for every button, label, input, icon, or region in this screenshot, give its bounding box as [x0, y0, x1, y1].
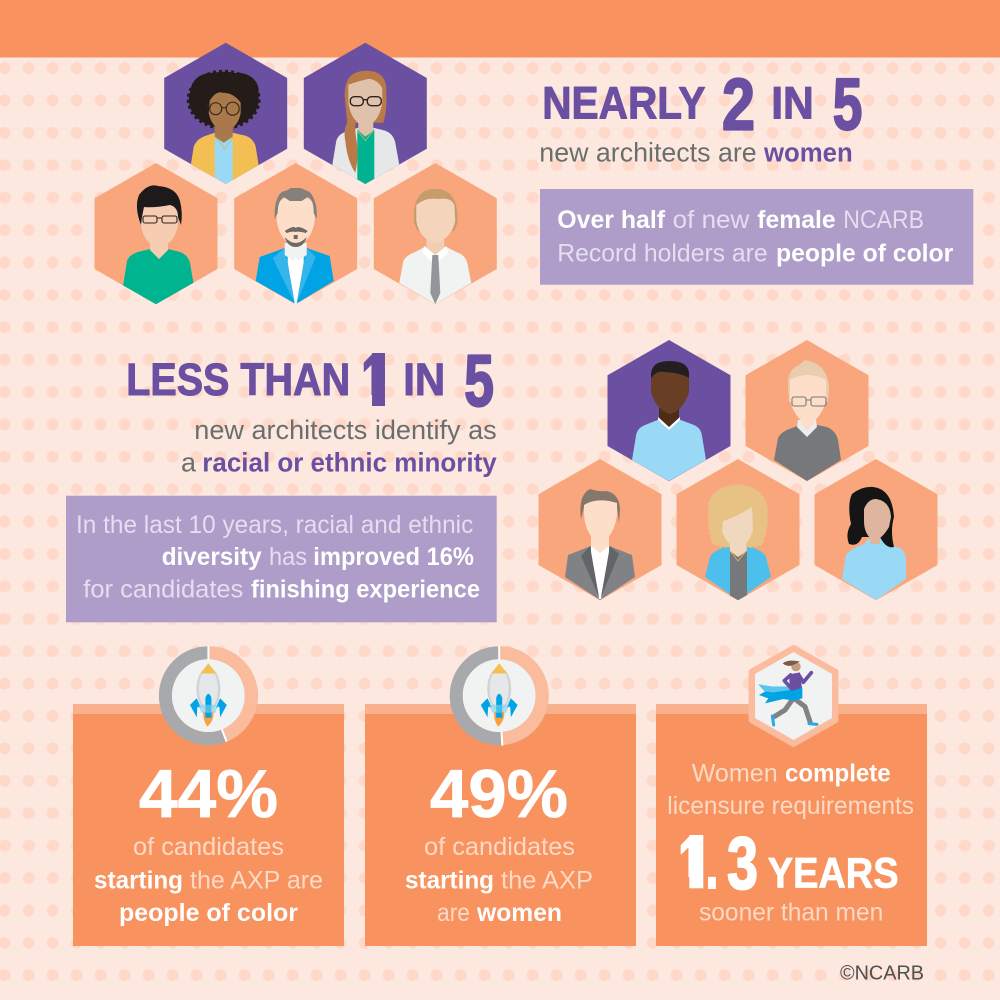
- portrait: woman with afro on purple hexagon: [164, 43, 288, 185]
- portrait: woman with curly blond hair and blue jacket: [676, 459, 800, 601]
- description: of candidates starting the AXP are women: [405, 833, 593, 927]
- description: of candidates starting the AXP are people of color: of candidates: [133, 833, 284, 861]
- heading: less than 1 in 5: IN: [403, 354, 445, 405]
- icon: runner crossing finish ribbon in hexagon: [752, 648, 835, 744]
- statistic: 1.3 years: [680, 835, 898, 890]
- heading: nearly 2 in 5: NEARLY: [542, 78, 706, 128]
- subheading: new architects are women: new architects are: [539, 138, 757, 168]
- card: 44% of candidates: [73, 646, 344, 946]
- statistic: 49%: 49%: [430, 756, 568, 832]
- card: 49% of candidates: [365, 646, 636, 946]
- description: of candidates starting the AXP are women: starting: [405, 866, 494, 894]
- callout: over half of new female record holders: NCARB: [843, 206, 924, 234]
- description: women complete licensure requirements: licensure requirements: [667, 792, 914, 820]
- callout: over half of new female record holders: female: [757, 206, 836, 234]
- icon: rocket: [481, 664, 518, 727]
- portrait: blond older man in grey sweater with glasses: [745, 340, 869, 482]
- callout: racial and ethnic diversity improved 16%: [66, 496, 497, 622]
- portrait: woman with red braid on purple hexagon: [303, 43, 427, 185]
- portrait: woman with long black hair in light blue top: [814, 459, 938, 601]
- heading: nearly 2 in 5: IN: [771, 78, 814, 128]
- donut chart: 44% people of color: [165, 646, 251, 742]
- description: of candidates starting the AXP are women: women: [476, 899, 562, 927]
- description: of candidates starting the AXP are people of color: [94, 833, 323, 927]
- description: of candidates starting the AXP are women: are: [437, 899, 470, 927]
- description: women complete licensure requirements: Women: [692, 760, 778, 788]
- description: women complete licensure requirements: [667, 760, 914, 820]
- heading: less than 1 in 5: [128, 353, 494, 408]
- callout: over half of new female record holders: Over half: [557, 206, 666, 234]
- callout: racial and ethnic diversity improved 16%: improved 16%: [313, 543, 474, 571]
- portrait group: racial and ethnic diversity hexagons: [538, 340, 938, 601]
- portrait group: women and men hexagons: [94, 43, 497, 305]
- copyright: ©NCARB: [840, 962, 924, 984]
- portrait: man with goatee and blue suit: [234, 163, 358, 305]
- callout: racial and ethnic diversity improved 16%: finishing experience: [251, 576, 480, 604]
- heading: less than 1 in 5: LESS THAN: [126, 354, 350, 405]
- heading: less than 1 in 5: 1: [361, 339, 387, 422]
- donut chart: 49% women: [456, 646, 542, 746]
- statistic: 1.3 years: .: [705, 821, 719, 904]
- statistic: 1.3 years: YEARS: [768, 850, 898, 898]
- callout: over half of new female record holders: [540, 189, 973, 285]
- top banner: [0, 0, 1000, 58]
- card: women complete licensure sooner: [656, 648, 927, 946]
- callout: racial and ethnic diversity improved 16%: for candidates: [83, 576, 243, 604]
- callout: racial and ethnic diversity improved 16%: has: [269, 543, 307, 571]
- heading: nearly 2 in 5: [542, 64, 862, 146]
- icon: rocket: [190, 664, 227, 727]
- callout: over half of new female record holders: of new: [673, 206, 750, 234]
- heading: less than 1 in 5: 5: [464, 341, 494, 422]
- callout: over half of new female record holders: Record holders are: [557, 240, 768, 268]
- heading: nearly 2 in 5: 5: [833, 64, 862, 146]
- statistic: 1.3 years: 1: [678, 821, 704, 904]
- portrait: man with black hair and glasses, green top: [94, 163, 218, 305]
- description: of candidates starting the AXP are women: of candidates: [424, 833, 575, 861]
- callout: racial and ethnic diversity improved 16%: diversity: [162, 543, 262, 571]
- callout: over half of new female record holders: people of color: [776, 240, 954, 268]
- subheading: new architects identify as a racial or ethnic minority: racial or ethnic minority: [202, 448, 497, 478]
- description: of candidates starting the AXP are people of color: people of color: [119, 899, 298, 927]
- subheading: new architects identify as a racial or ethnic minority: a: [181, 448, 197, 478]
- portrait: man in grey suit: [538, 459, 662, 601]
- subheading: new architects identify as a racial or ethnic minority: new architects identify as: [194, 415, 497, 445]
- portrait: blond man with white shirt and grey tie: [373, 163, 497, 305]
- description: of candidates starting the AXP are women: the AXP: [501, 866, 593, 894]
- description: women complete licensure requirements: complete: [785, 760, 891, 788]
- portrait: Black man in light blue shirt on purple hexagon: [607, 340, 731, 482]
- subheading: new architects identify as a racial or ethnic minority: [181, 415, 497, 478]
- statistic: 44%: 44%: [139, 756, 278, 832]
- subheading: new architects are women: women: [763, 138, 853, 168]
- description: of candidates starting the AXP are people of color: starting: [94, 866, 183, 894]
- statistic: 1.3 years: 3: [727, 821, 758, 904]
- heading: nearly 2 in 5: 2: [722, 64, 755, 146]
- description: sooner than men: sooner than men: [699, 899, 883, 927]
- description: of candidates starting the AXP are people of color: the AXP are: [190, 866, 323, 894]
- callout: racial and ethnic diversity improved 16%: In the last 10 years, racial and ethnic: [76, 511, 473, 539]
